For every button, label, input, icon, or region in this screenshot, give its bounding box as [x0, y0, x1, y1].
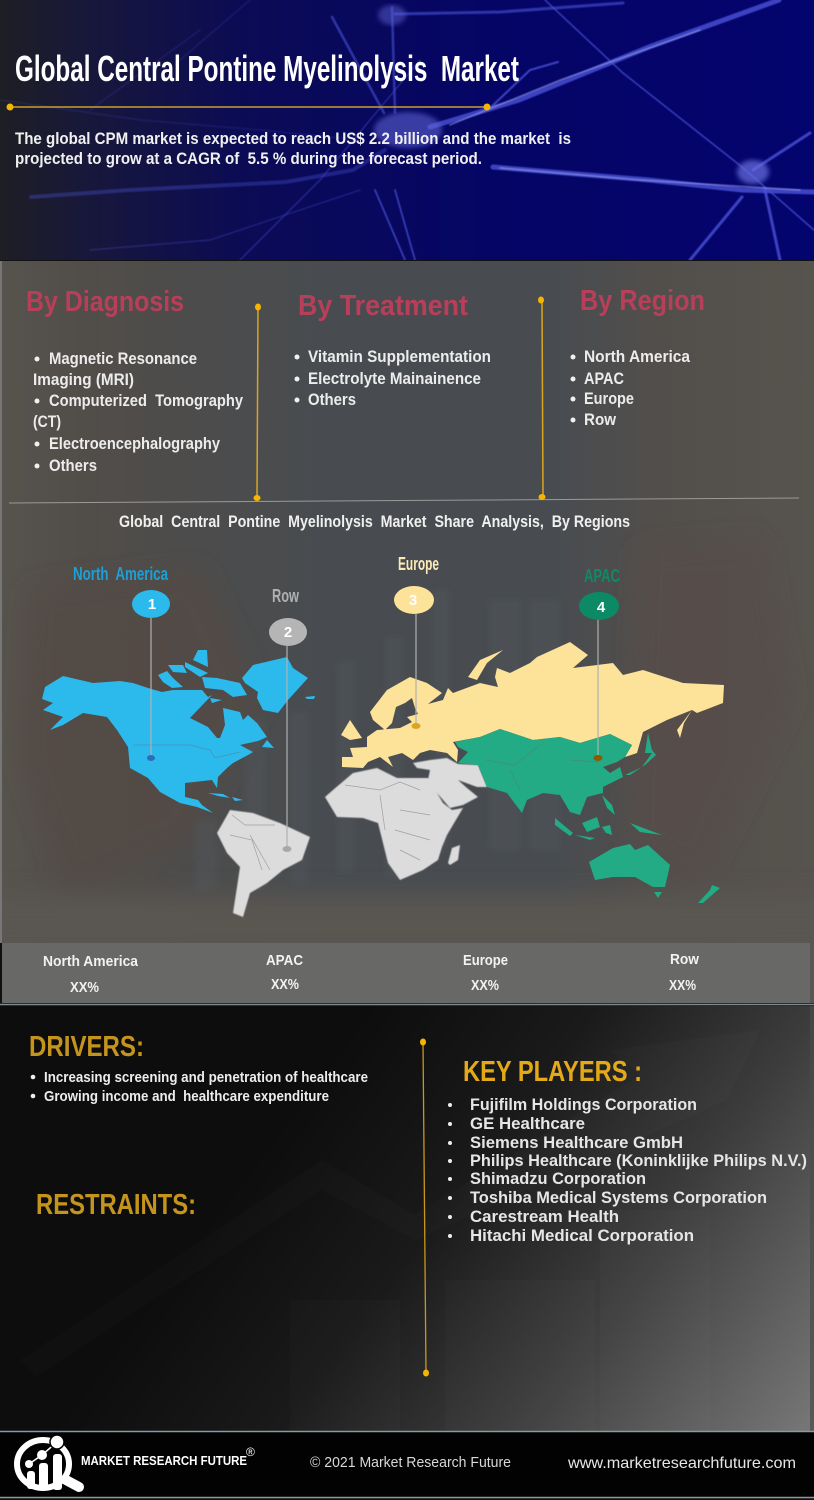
- heading: restraints: RESTRAINTS:: [36, 1189, 196, 1221]
- list: drivers: [31, 1069, 368, 1105]
- list: key players: GE Healthcare: [470, 1115, 585, 1133]
- heading: by diagnosis: By Diagnosis: [26, 286, 184, 318]
- table cell: north america: [43, 953, 139, 996]
- hero description: projected to grow at a CAGR of 5.5 % during the forecast period.: [15, 149, 482, 168]
- list: diagnosis items: Electroencephalography: [49, 435, 221, 453]
- map: internal borders: [133, 745, 600, 870]
- hero description: The global CPM market is expected to reach US$ 2.2 billion and the market is: [15, 129, 571, 148]
- table cell: row: [669, 951, 699, 994]
- list: key players: Carestream Health: [470, 1208, 619, 1226]
- list: region items: North America: [584, 348, 691, 366]
- panel: key players: [448, 1056, 807, 1245]
- list: region items: Row: [584, 411, 616, 429]
- panel: by diagnosis: [26, 286, 244, 475]
- hero description: [15, 129, 571, 168]
- list: key players: Shimadzu Corporation: [470, 1170, 646, 1188]
- list: key players: Toshiba Medical Systems Corporation: [470, 1189, 767, 1207]
- list: treatment items: Vitamin Supplementation: [308, 348, 491, 366]
- logo wordmark: MARKET RESEARCH FUTURE: [81, 1453, 247, 1468]
- callout: apac: 4: [597, 599, 606, 616]
- list: treatment items: [294, 348, 491, 409]
- list: diagnosis items: (CT): [33, 413, 61, 431]
- map: south america, africa and middle east: [217, 758, 487, 917]
- list: region items: APAC: [584, 370, 624, 388]
- callout: europe: 3: [409, 592, 417, 609]
- table cell: europe: [463, 952, 508, 994]
- middle section background: [0, 261, 814, 955]
- logo wordmark: [81, 1445, 255, 1468]
- callout: europe: [394, 554, 439, 729]
- map: north america: [42, 650, 315, 813]
- list: key players: Siemens Healthcare GmbH: [470, 1134, 683, 1152]
- panel: drivers: [29, 1031, 368, 1105]
- callout: row: Row: [272, 586, 300, 606]
- callout: row: [269, 586, 307, 852]
- table cell: europe: XX%: [471, 977, 499, 994]
- list: diagnosis items: Imaging (MRI): [33, 371, 134, 389]
- table cell: europe: Europe: [463, 952, 508, 969]
- heading: by treatment: By Treatment: [298, 290, 468, 322]
- share table strip: [0, 943, 814, 1004]
- segment dividers: [9, 296, 799, 503]
- hero banner background: [0, 0, 814, 261]
- hero divider with end dots: [6, 104, 490, 110]
- callout: north america: North America: [73, 564, 169, 584]
- list: diagnosis items: [33, 350, 244, 475]
- callout: row: 2: [284, 624, 292, 641]
- list: key players: [448, 1096, 807, 1245]
- heading: by region: By Region: [580, 285, 705, 317]
- logo wordmark: ®: [246, 1445, 255, 1459]
- map: europe and russia: [341, 642, 724, 768]
- list: key players: Fujifilm Holdings Corporation: [470, 1096, 697, 1114]
- table cell: north america: North America: [43, 953, 139, 970]
- vertical divider with end dots: [420, 1038, 429, 1376]
- callout: north america: [73, 564, 170, 761]
- list: drivers: Growing income and healthcare expenditure: [44, 1088, 329, 1105]
- list: diagnosis items: Magnetic Resonance: [49, 350, 197, 368]
- callout: north america: 1: [148, 596, 156, 613]
- copyright: © 2021 Market Research Future: [310, 1454, 511, 1471]
- list: key players: Hitachi Medical Corporation: [470, 1227, 694, 1245]
- lower section background: [0, 1006, 814, 1432]
- table cell: apac: XX%: [271, 976, 299, 993]
- list: diagnosis items: Others: [49, 457, 97, 475]
- list: key players: Philips Healthcare (Koninklijke Philips N.V.): [470, 1152, 807, 1170]
- list: region items: [570, 348, 691, 429]
- panel: by region: [570, 285, 705, 429]
- list: drivers: Increasing screening and penetration of healthcare: [44, 1069, 368, 1086]
- list: diagnosis items: Computerized Tomography: [49, 392, 244, 410]
- callout: apac: [579, 566, 620, 761]
- list: region items: Europe: [584, 390, 634, 408]
- website: www.marketresearchfuture.com: [567, 1455, 796, 1472]
- list: treatment items: Electrolyte Mainainence: [308, 370, 481, 388]
- map heading: Global Central Pontine Myelinolysis Market Share Analysis, By Regions: [119, 513, 630, 531]
- list: treatment items: Others: [308, 391, 356, 409]
- table cell: apac: APAC: [266, 952, 303, 969]
- callout: europe: Europe: [398, 554, 439, 574]
- table cell: row: XX%: [669, 977, 696, 994]
- map: asia pacific: [455, 729, 720, 903]
- table cell: row: Row: [670, 951, 699, 968]
- callout: apac: APAC: [584, 566, 620, 586]
- heading: drivers: DRIVERS:: [29, 1031, 144, 1063]
- footer bar: [0, 1431, 814, 1498]
- panel: by treatment: [294, 290, 491, 409]
- heading: key players: KEY PLAYERS :: [463, 1056, 642, 1088]
- hero title: Global Central Pontine Myelinolysis Market: [15, 48, 519, 89]
- icon: magnifier logo: [17, 1435, 79, 1490]
- world map: [42, 642, 724, 917]
- table cell: apac: [266, 952, 303, 993]
- table cell: north america: XX%: [70, 979, 99, 996]
